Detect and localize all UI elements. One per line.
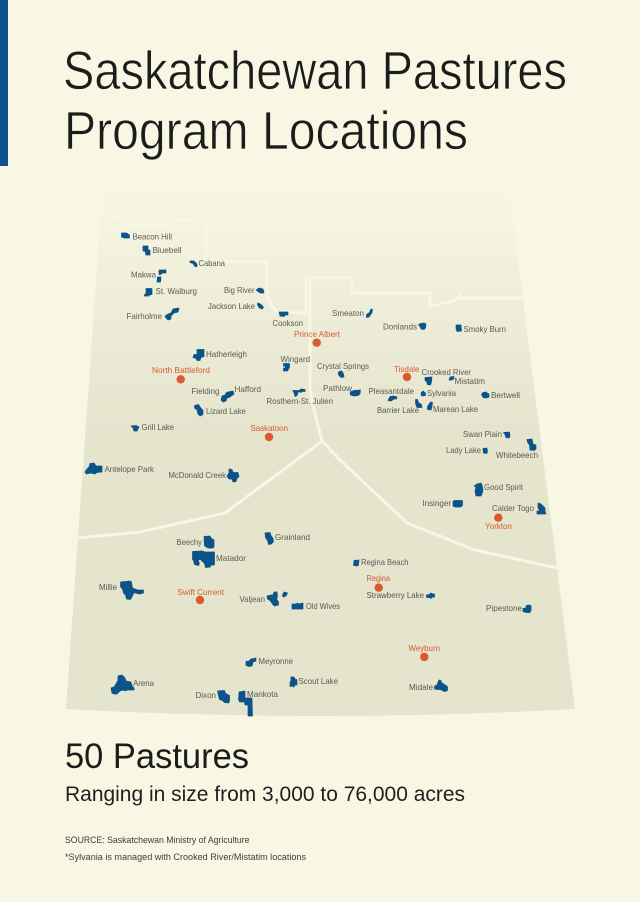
pasture: Pathlow: Pathlow	[323, 383, 353, 393]
pasture: Millie: Millie	[99, 582, 117, 592]
pasture: Crystal Springs	[317, 361, 369, 378]
pasture: Scout Lake: Scout Lake	[298, 676, 338, 686]
footnote: *Sylvania is managed with Crooked River/Mistatim locations	[65, 852, 306, 862]
region boundaries	[78, 209, 557, 568]
pasture: Fairholme: Fairholme	[126, 311, 162, 321]
city: Tisdale: Tisdale	[394, 364, 420, 374]
city: Yorkton: Yorkton	[485, 521, 512, 531]
city: Yorkton	[485, 514, 512, 531]
pasture: Whitebeech: Whitebeech	[496, 450, 538, 460]
pasture: Grainland	[265, 532, 310, 544]
city: Regina: Regina	[366, 573, 390, 583]
pasture: Mankota	[238, 689, 278, 716]
pasture: McDonald Creek	[168, 469, 239, 482]
pasture: Smeaton: Smeaton	[332, 308, 364, 318]
pasture: Rosthern-St. Julien: Rosthern-St. Julien	[266, 396, 333, 406]
city: Swift Current	[178, 587, 225, 604]
pasture: Strawberry Lake: Strawberry Lake	[366, 590, 424, 600]
title: Program Locations	[64, 101, 468, 161]
city: Prince Albert: Prince Albert	[294, 329, 341, 339]
pasture: Crystal Springs: Crystal Springs	[317, 361, 369, 371]
pasture: Fielding and Hafford: Hafford	[234, 384, 261, 394]
pasture: Dixon: Dixon	[196, 690, 216, 700]
pasture: Pleasantdale	[368, 386, 414, 401]
pasture: Smoky Burn: Smoky Burn	[464, 324, 506, 334]
city: Swift Current: Swift Current	[178, 587, 225, 597]
city: Weyburn: Weyburn	[408, 643, 440, 653]
pasture: Antelope Park: Antelope Park	[104, 464, 155, 474]
pasture: Lady Lake: Lady Lake	[446, 445, 481, 455]
pasture: Rosthern-St. Julien	[266, 389, 333, 406]
pasture: Wingard: Wingard	[280, 354, 310, 364]
pasture: Fairholme	[126, 308, 179, 321]
pasture: Lizard Lake	[194, 404, 246, 416]
pasture: Cookson: Cookson	[272, 318, 303, 328]
pasture: Bertwell: Bertwell	[491, 390, 520, 400]
pasture: Antelope Park	[85, 463, 155, 474]
pasture: Grainland: Grainland	[275, 532, 310, 542]
city: Tisdale	[394, 364, 420, 381]
pasture: Barrier Lake	[377, 400, 422, 415]
pasture: Midale: Midale	[409, 682, 433, 692]
city: Prince Albert	[294, 329, 341, 347]
title	[63, 41, 567, 161]
pasture: Donlands: Donlands	[383, 322, 417, 332]
pasture: Whitebeech	[496, 439, 538, 460]
pasture: Meyronne: Meyronne	[258, 656, 293, 666]
pasture: Beechy: Beechy	[176, 537, 203, 547]
pasture: Beacon Hill: Beacon Hill	[132, 232, 172, 242]
pasture: Hatherleigh: Hatherleigh	[206, 349, 247, 359]
pasture: Valjean: Valjean	[240, 594, 265, 604]
pasture: Pathlow	[323, 383, 360, 396]
pasture: Good Spirit	[474, 482, 524, 496]
pasture: Barrier Lake: Barrier Lake	[377, 405, 419, 415]
pasture: Cookson	[272, 312, 303, 328]
pasture: Marean Lake: Marean Lake	[433, 404, 478, 414]
pasture: Regina Beach: Regina Beach	[361, 557, 409, 567]
pasture: Swan Plain: Swan Plain	[463, 429, 502, 439]
city: Weyburn	[408, 643, 440, 661]
pasture: Fielding and Hafford	[192, 384, 261, 402]
pasture: Millie	[99, 581, 144, 600]
city: Saskatoon: Saskatoon	[250, 423, 288, 433]
pasture: Valjean	[240, 592, 288, 606]
pasture: Matador	[192, 551, 246, 568]
pasture: Pipestone: Pipestone	[486, 603, 522, 613]
boundary notch	[457, 290, 462, 299]
pasture: Makwa	[131, 270, 166, 282]
pasture: Calder Togo: Calder Togo	[492, 503, 534, 513]
pasture: Pleasantdale: Pleasantdale	[368, 386, 414, 396]
pasture: St. Walburg: St. Walburg	[156, 286, 197, 296]
pasture: McDonald Creek: McDonald Creek	[168, 470, 227, 480]
city: Saskatoon	[250, 423, 288, 441]
pasture: Cabana: Cabana	[198, 258, 225, 268]
pasture: Beechy	[176, 536, 214, 548]
pasture: Old Wives	[292, 601, 340, 611]
city: Regina	[366, 573, 390, 592]
source note: SOURCE: Saskatchewan Ministry of Agriculture	[65, 835, 250, 845]
stat heading: 50 Pastures	[65, 737, 249, 776]
title: Saskatchewan Pastures	[63, 41, 567, 101]
pasture: Lizard Lake: Lizard Lake	[206, 406, 246, 416]
pasture: Grill Lake: Grill Lake	[142, 422, 174, 432]
pasture: Crooked River	[422, 367, 471, 385]
pasture: Hatherleigh	[193, 349, 247, 360]
pasture: Crooked River: Crooked River	[422, 367, 471, 377]
pasture: Good Spirit: Good Spirit	[484, 482, 524, 492]
accent bar	[0, 0, 8, 166]
city: North Battleford	[152, 365, 210, 383]
pasture: Dixon	[196, 690, 230, 703]
pasture: Arena	[111, 675, 154, 694]
pasture: Insinger: Insinger	[422, 498, 451, 508]
pasture: Bluebell: Bluebell	[152, 245, 182, 255]
pasture: Arena: Arena	[133, 678, 154, 688]
pasture: Midale	[409, 680, 448, 692]
pasture: Wingard	[280, 354, 310, 371]
pasture: Fielding and Hafford: Fielding	[192, 386, 220, 396]
pasture: Mistatim: Mistatim	[454, 376, 485, 386]
pasture: Meyronne	[246, 656, 293, 666]
city: North Battleford: North Battleford	[152, 365, 210, 375]
map of Saskatchewan	[66, 182, 575, 716]
pasture: Matador: Matador	[216, 553, 246, 563]
pasture: Jackson Lake: Jackson Lake	[208, 301, 255, 311]
pasture: Sylvania: Sylvania	[427, 388, 456, 398]
pasture: Mankota: Mankota	[247, 689, 278, 699]
pasture: Old Wives: Old Wives	[306, 601, 340, 611]
stat subheading: Ranging in size from 3,000 to 76,000 acres	[65, 782, 465, 806]
pasture: Makwa: Makwa	[131, 270, 156, 280]
province land	[66, 182, 575, 716]
pasture: Big River: Big River	[224, 285, 255, 295]
